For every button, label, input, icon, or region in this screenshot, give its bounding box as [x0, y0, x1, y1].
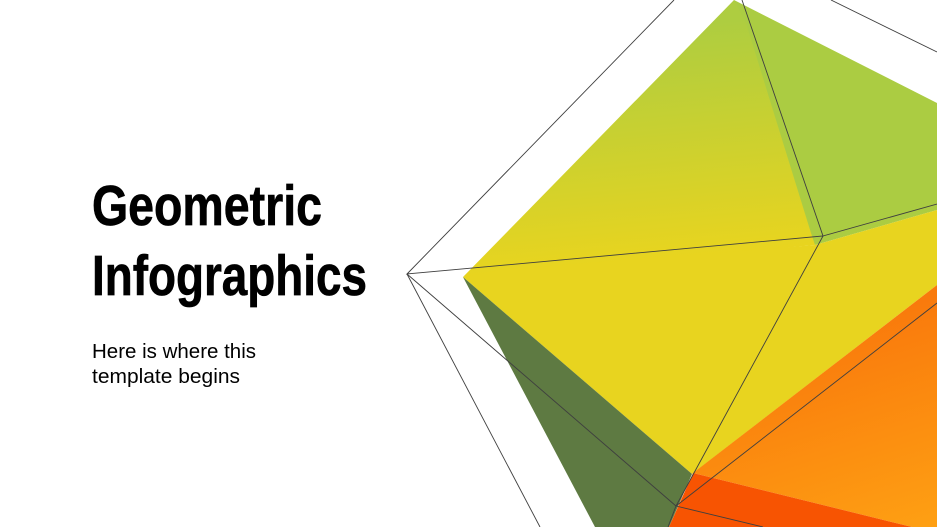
facet: green upper right [725, 0, 937, 245]
subtitle: Here is where this [92, 340, 256, 363]
facet: orange gradient [693, 285, 937, 527]
title: Geometric [92, 174, 322, 238]
title: Infographics [92, 244, 367, 308]
wireframe outline [407, 0, 937, 527]
facet: yellow centre [463, 210, 937, 474]
facet: lime to yellow gradient [463, 0, 815, 277]
title [92, 174, 367, 308]
subtitle [92, 340, 256, 388]
facet: dark green lower left [463, 277, 692, 527]
subtitle: template begins [92, 365, 240, 388]
polyhedron graphic [407, 0, 937, 527]
facet: red orange bottom [669, 473, 912, 527]
